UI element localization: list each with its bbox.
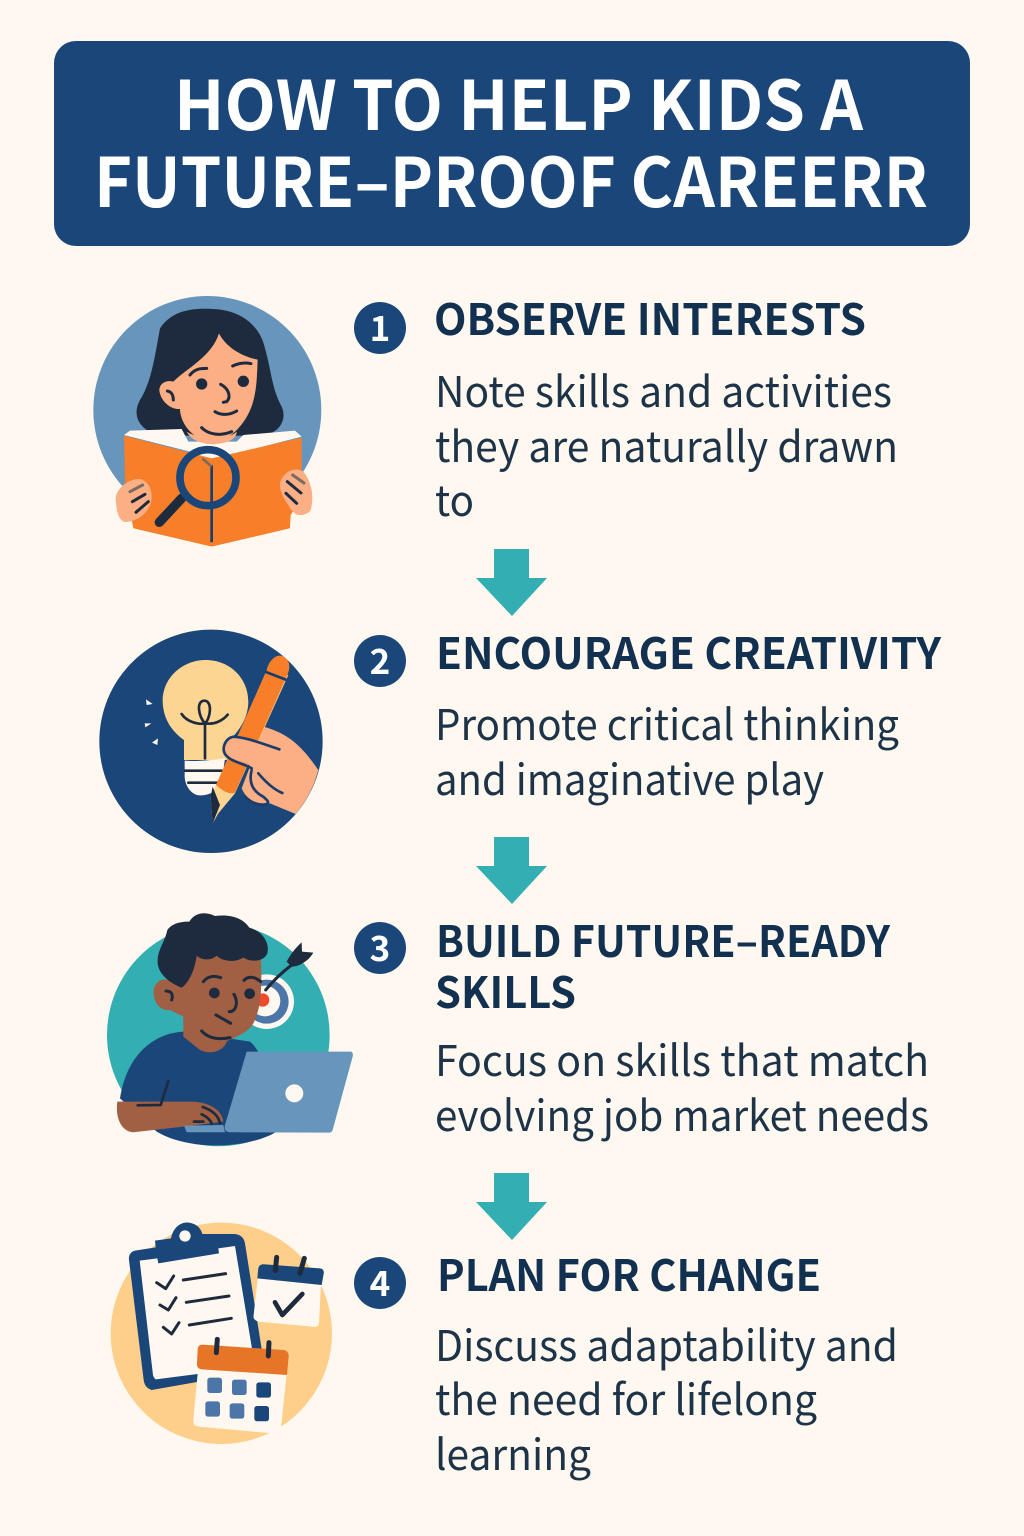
icon: boy with laptop and target [107,913,353,1146]
arrow 2 to 3 [476,837,547,904]
step 1 body text [435,359,898,529]
step 2 body text [435,692,899,808]
step 3 body text: evolving job market needs [435,1083,929,1144]
step 3 heading: BUILD FUTURE–READY [436,908,891,970]
step 4 body text: learning [435,1422,591,1483]
title banner: HOW TO HELP KIDS A [174,51,863,150]
step 1 heading: OBSERVE INTERESTS [434,286,866,348]
step 4 body text [435,1313,898,1483]
title banner: FUTURE–PROOF CAREERR [94,128,928,227]
step 4 body text: the need for lifelong [435,1367,817,1428]
icon: clipboard and calendars [111,1223,332,1444]
target [239,974,294,1029]
step 2 body text: and imaginative play [435,747,824,808]
step 3 body text [435,1028,929,1144]
step 3 body text: Focus on skills that match [435,1028,929,1089]
step 2 heading: ENCOURAGE CREATIVITY [436,620,942,682]
step 3 heading: SKILLS [435,959,576,1021]
step 4 number badge: 4 [370,1256,390,1307]
step 4 heading: PLAN FOR CHANGE [437,1242,821,1304]
arrow 1 to 2 [476,549,547,616]
step 3 number badge [354,921,406,974]
step 2 number badge [354,634,406,687]
step 4 body text: Discuss adaptability and [435,1313,898,1374]
step 4 number badge [354,1256,406,1309]
step 3 number badge: 3 [370,921,390,972]
title banner [54,41,970,246]
step 1 number badge [354,301,406,354]
step 2 number badge: 2 [370,634,390,685]
step 3 heading [435,908,891,1021]
icon: lightbulb and pencil [99,630,323,853]
arrow 3 to 4 [476,1173,547,1240]
step 1 body text: Note skills and activities [435,359,892,420]
step 1 body text: to [435,468,474,529]
step 1 number badge: 1 [370,301,390,352]
step 1 body text: they are naturally drawn [435,414,898,475]
step 2 body text: Promote critical thinking [435,692,899,753]
icon: girl reading with magnifying glass [93,296,321,547]
